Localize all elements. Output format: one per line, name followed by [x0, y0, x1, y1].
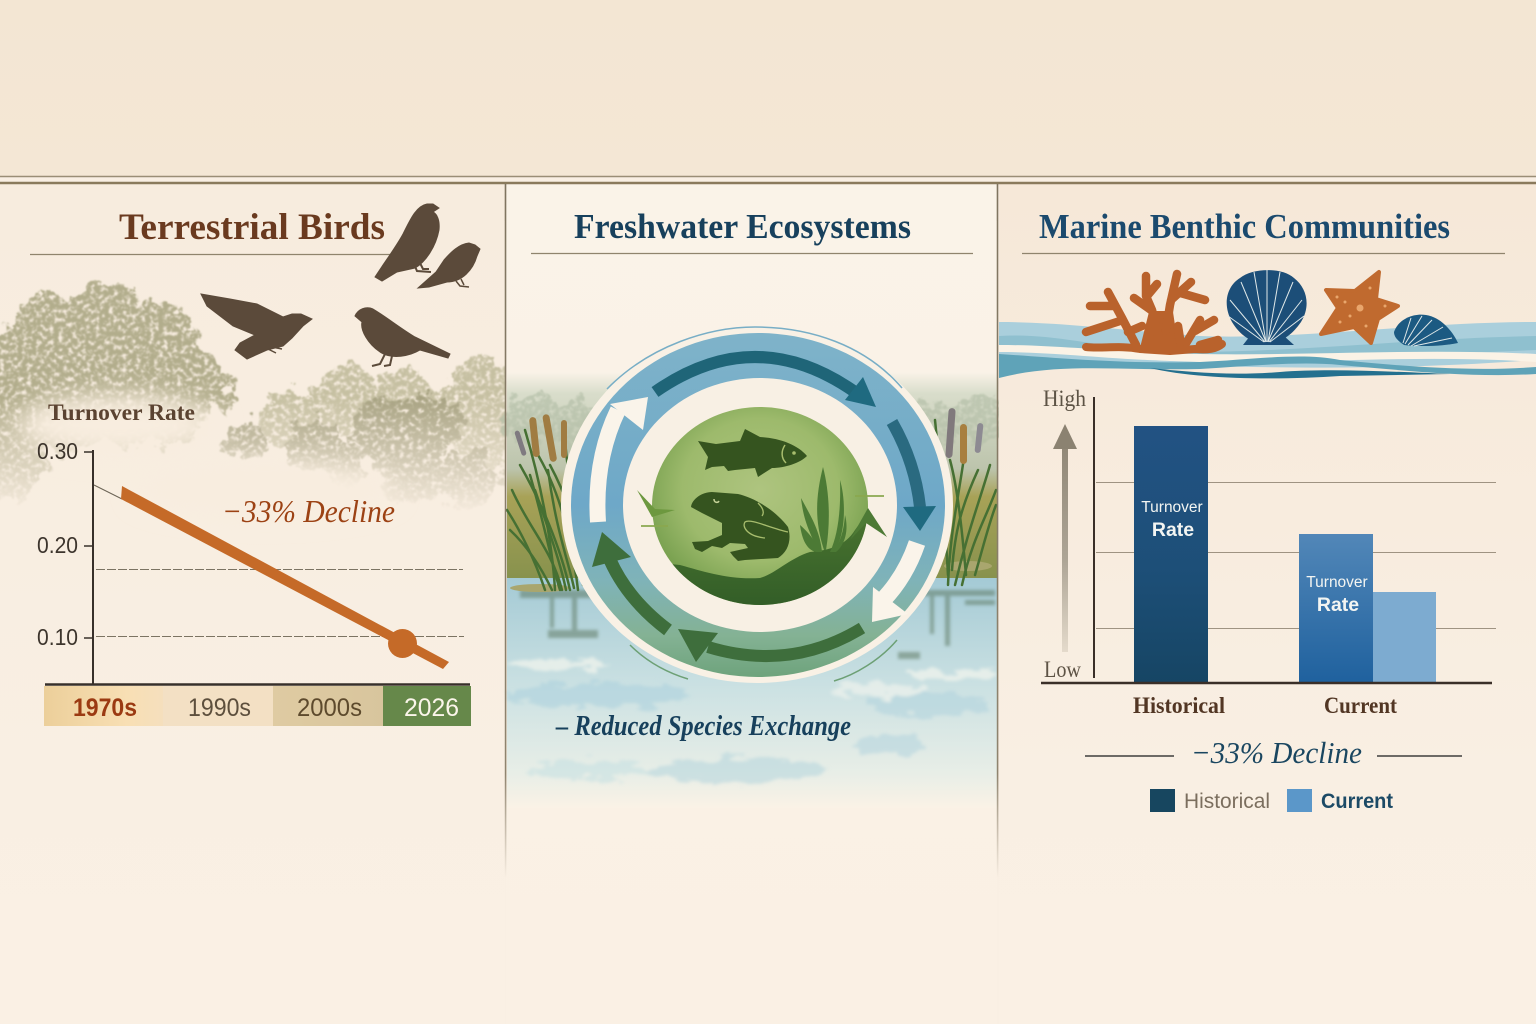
central green disc [652, 407, 868, 605]
icon: small shell [1394, 315, 1458, 346]
scale arrow [1053, 424, 1077, 652]
baseline axis [1041, 682, 1492, 684]
bar label: current: Turnover [1306, 574, 1368, 591]
legend: Current [1321, 790, 1393, 813]
panel: terrestrial birds [0, 204, 505, 726]
bar chart: turnover rate [1041, 386, 1496, 718]
icon: flying bird [201, 294, 312, 359]
small inner arrow left [637, 490, 675, 526]
panel dividers [506, 184, 998, 878]
bar label: historical: Turnover [1141, 499, 1203, 516]
x axis [45, 683, 470, 686]
thin outer arcs [607, 327, 902, 681]
bar: historical [1134, 426, 1208, 683]
water clouds [510, 660, 995, 782]
caption: reduced species exchange: – Reduced Species Exchange [555, 711, 851, 742]
scale labels: Low [1044, 657, 1081, 682]
species exchange cycle diagram [561, 327, 953, 683]
gridlines [1096, 482, 1496, 628]
outer cream ring [561, 327, 953, 683]
icon: fish [698, 429, 807, 477]
timeline strip: 1970s [73, 694, 137, 722]
ground inside disc [672, 523, 866, 605]
heading rule [531, 252, 973, 254]
icon: perched bird small [418, 243, 480, 288]
arrow: right blue [892, 422, 936, 531]
lily pads [510, 561, 992, 592]
legend: Historical [1184, 790, 1270, 813]
scale labels [1043, 386, 1086, 682]
declining trend line [121, 486, 449, 669]
heading: freshwater ecosystems: Freshwater Ecosystems [574, 207, 911, 246]
y axis tick labels [37, 438, 78, 650]
icon: coral [1086, 274, 1222, 352]
inner cream field [623, 378, 897, 632]
icon: standing bird [355, 308, 450, 366]
bar label: current: Rate [1317, 594, 1359, 616]
icon: scallop shell [1227, 270, 1307, 345]
axis label: turnover rate: Turnover Rate [48, 400, 195, 425]
arrow: right white [872, 543, 917, 622]
category labels: Current [1324, 693, 1397, 718]
scale labels: High [1043, 386, 1086, 411]
vertical axis [1093, 397, 1095, 678]
flow ring [571, 333, 945, 677]
heading: marine benthic communities: Marine Benthic Communities [1039, 207, 1450, 246]
bar label: historical: Rate [1152, 519, 1194, 541]
reeds right [935, 420, 996, 585]
timeline strip [44, 686, 471, 726]
cream glow behind axis label [18, 395, 395, 516]
reeds left [507, 430, 585, 590]
bar: current light [1373, 592, 1436, 683]
legend [1150, 789, 1393, 813]
bar label: historical [1141, 499, 1203, 541]
y axis [84, 450, 93, 685]
top header band [0, 0, 1536, 177]
callout: 33 percent decline: −33% Decline [1191, 735, 1362, 770]
timeline strip: 2000s [297, 694, 362, 722]
panel: freshwater ecosystems [500, 214, 999, 791]
forest canopy background [0, 283, 524, 510]
panel: marine benthic communities [999, 184, 1536, 1024]
thin lead line [94, 485, 122, 499]
icon: frog [691, 492, 790, 561]
icon: starfish [1321, 272, 1398, 343]
timeline strip: 1990s [188, 694, 251, 722]
y axis tick labels: 0.30 [37, 438, 78, 464]
arrow: bottom green [678, 628, 862, 662]
arrow: left white [597, 397, 648, 522]
category labels: Historical [1133, 693, 1225, 718]
header divider lines [0, 176, 1536, 183]
y axis tick labels: 0.10 [37, 624, 78, 650]
end point marker [388, 629, 417, 658]
callout: 33 percent decline: −33% Decline [222, 493, 395, 529]
arrow: left green [592, 532, 668, 630]
arrow: top blue [655, 357, 876, 407]
heading rule [1022, 252, 1505, 254]
timeline strip: 2026 [404, 694, 459, 722]
wetland scene [504, 372, 1004, 808]
category labels [1133, 693, 1397, 718]
bar: current [1299, 534, 1373, 683]
reflections [520, 590, 995, 659]
heading rule [30, 254, 392, 256]
small inner arrow right [850, 496, 887, 540]
line chart: terrestrial birds turnover [37, 438, 470, 685]
y axis tick labels: 0.20 [37, 532, 78, 558]
icon: water plant [800, 467, 847, 552]
dashed gridlines [96, 570, 464, 636]
heading: terrestrial birds: Terrestrial Birds [119, 207, 385, 248]
bar label: current [1306, 574, 1368, 616]
icon: perched bird large [375, 204, 439, 281]
waves band [999, 322, 1536, 378]
